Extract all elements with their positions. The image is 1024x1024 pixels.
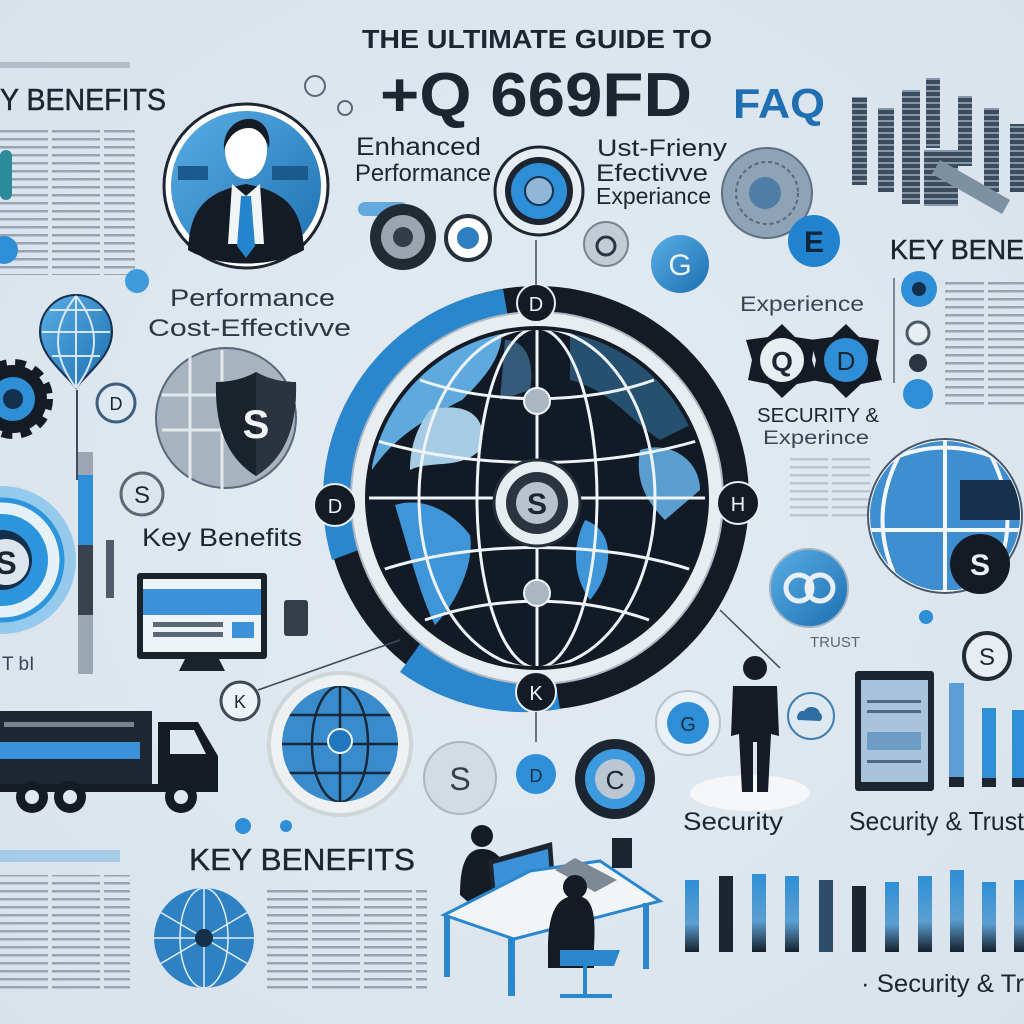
text block: left column [0,62,135,275]
text block: bottom left [0,850,130,990]
icon: S small coin right: S [979,644,995,671]
text: security and experience: Experince [763,428,869,449]
icon: businessman portrait [164,104,328,268]
main globe [314,284,759,712]
icon: dark ring coin [575,739,655,819]
text: experience: Experience [740,293,864,316]
icon: hex badges: Q [771,346,793,377]
icon: blue letter button [651,235,709,293]
icon: dark badge [358,202,436,270]
ring badge top [517,284,555,322]
small accent dots [235,76,933,834]
globe node bottom [524,580,550,606]
title: THE ULTIMATE GUIDE TO [362,24,712,54]
text: security: Security [683,808,784,836]
globe node top [524,388,550,414]
heading: key benefits top left: Y BENEFITS [0,82,166,117]
icon: blue swirl badge [770,549,848,627]
icon: small blue badge: G [680,714,696,736]
ring badge right: H [731,494,745,516]
icon: blue diamond pin [516,754,556,794]
text: bottom security and trust: · Security & Tr [861,970,1024,998]
text: user friendly: Experiance [596,183,711,209]
text: security and experience [757,405,880,518]
ring badge left: D [328,496,342,518]
connector lines [258,240,780,742]
icon: shield: S [243,403,269,447]
icon: blue letter button: G [668,249,692,282]
icon: D badge [97,384,135,422]
text: security and experience: SECURITY & [757,405,880,427]
icon: gray S coin [424,742,496,814]
globe map [365,326,709,670]
text: user friendly [596,135,727,209]
icon: small globe right [868,439,1022,595]
icon: gray lock badge [584,222,628,266]
icon: truck [0,711,218,813]
title: +Q 669FD [380,61,692,130]
text: user friendly: Efectivve [596,160,708,187]
globe center coin: S [527,488,547,521]
icon: small globe right: S [970,549,990,582]
icon: globe bottom left [269,673,411,815]
icon: K badge: K [234,692,246,712]
icon: S small coin right [964,633,1010,679]
icon: monitor [137,573,308,671]
chart: bottom bars [685,870,1024,952]
icon: hex badges: D [837,346,855,376]
ring badge bottom: K [529,683,543,705]
text: performance cost-effective: Performance [170,285,335,312]
icon: top center lens [495,147,583,235]
text: trust: TRUST [810,634,860,651]
globe center coin [494,460,580,546]
heading: FAQ: FAQ [733,80,825,127]
icon: S coin left [121,473,163,515]
text block: right column with icons [894,271,1024,409]
chart: 3D city columns [852,78,1024,214]
icon: gear [0,365,47,433]
text: enhanced performance: Performance [355,160,491,187]
icon: S coin left: S [134,482,150,509]
text: tiny left label: T bI [2,654,34,675]
icon: blue E button: E [804,226,824,259]
icon: steel sphere [722,148,812,238]
heading: key benefits mid: Key Benefits [142,524,302,552]
icon: cloud badge [788,693,834,739]
text: performance cost-effective: Cost-Effectivve [148,315,351,342]
icon: standing businessman [690,656,810,811]
illustration: workstation [444,825,660,996]
icon: blue concentric target [0,486,76,634]
icon: D badge: D [110,394,122,414]
text: enhanced performance: Enhanced [356,133,481,161]
icon: small ring badge [446,216,490,260]
ring badge right [717,482,759,524]
icon: K badge [221,682,259,720]
text: user friendly: Ust-Frieny [597,135,727,162]
icon: gray S coin: S [449,761,471,797]
globe outer ring [323,286,749,712]
icon: balloon globe [40,269,149,480]
icon: hex badges [746,324,882,398]
icon: blue diamond pin: D [530,766,542,786]
ring badge top: D [529,294,543,316]
title [362,24,712,130]
icon: pens [78,452,114,674]
chart: right vertical bars [949,683,1024,787]
icon: shield [156,348,296,490]
text: enhanced performance [355,133,491,187]
ring badge left [314,484,356,526]
heading: key benefits bottom: KEY BENEFITS [189,842,415,877]
icon: blue E button [788,215,840,267]
icon: small blue badge [656,691,720,755]
icon: dark ring coin: C [606,765,624,795]
text: performance cost-effective [148,285,351,342]
text block: bottom center [267,885,427,990]
icon: globe bottom [154,888,254,988]
ring badge bottom [516,672,556,712]
icon: tablet [855,671,934,791]
